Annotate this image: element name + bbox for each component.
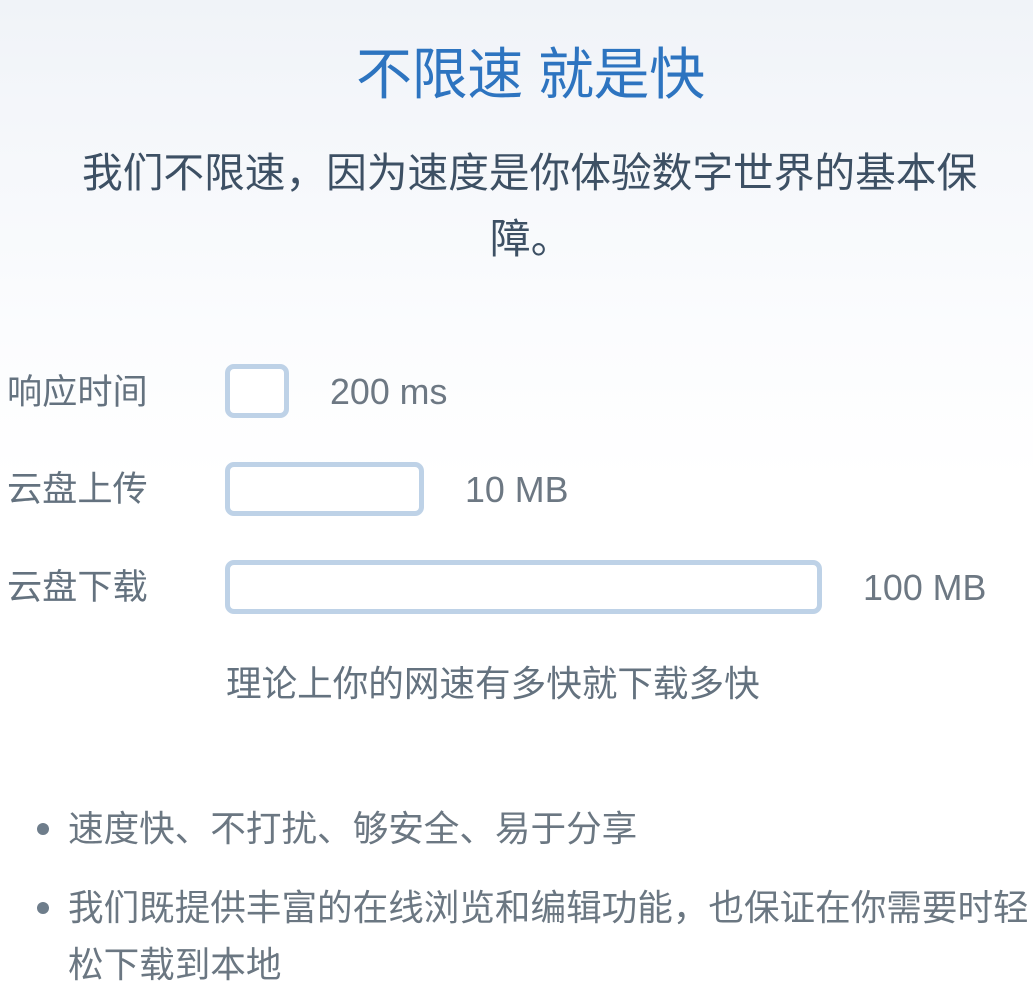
value: response time: 200 ms	[330, 372, 447, 412]
bullet 1 marker	[37, 823, 49, 835]
bullet 2 text line 1: 我们既提供丰富的在线浏览和编辑功能，也保证在你需要时轻	[68, 888, 1029, 928]
value: cloud upload: 10 MB	[465, 470, 568, 510]
bullet list	[37, 809, 1029, 985]
bar: cloud upload	[225, 462, 424, 516]
bullet 1 text: 速度快、不打扰、够安全、易于分享	[68, 809, 637, 849]
value: cloud download: 100 MB	[863, 568, 986, 608]
label: response time: 响应时间	[7, 373, 148, 412]
bullet 2 marker	[37, 902, 49, 914]
subtitle second line: 障。	[490, 216, 571, 262]
label: cloud download: 云盘下载	[7, 568, 148, 607]
title: 不限速 就是快	[356, 43, 705, 106]
bar: cloud download	[225, 560, 822, 614]
label: cloud upload: 云盘上传	[7, 470, 148, 509]
subtitle: 我们不限速，因为速度是你体验数字世界的基本保	[82, 150, 977, 196]
bar: response time	[225, 364, 289, 418]
chart note: 理论上你的网速有多快就下载多快	[226, 664, 760, 704]
bullet 2 text line 2: 松下载到本地	[68, 945, 281, 985]
